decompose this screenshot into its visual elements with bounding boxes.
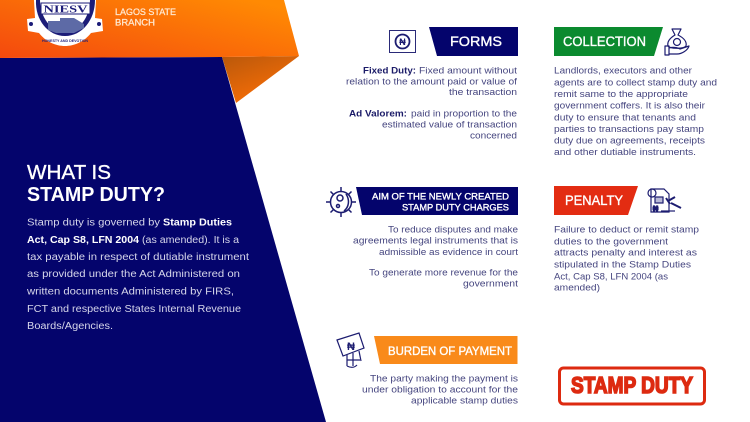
text block: definition: written documents Administered by FIRS, <box>26 286 234 298</box>
text block: collection: remit same to the appropriate <box>554 89 688 100</box>
text block: collection: duty to ensure that tenants and <box>554 112 696 124</box>
panel: forms <box>346 27 518 142</box>
title: STAMP DUTY? <box>27 184 165 206</box>
text block: aim: agreements legal instruments that is <box>353 236 518 246</box>
text block: burden of payment: applicable stamp duties <box>411 396 518 406</box>
text block: collection: government coffers. It is also their <box>554 100 706 112</box>
text block: definition: Stamp Duties <box>163 218 232 228</box>
text block: forms: the transaction <box>449 87 517 98</box>
text block: forms: Ad Valorem: <box>349 108 407 120</box>
icon: naira coin: ₦ <box>399 37 406 47</box>
branch name: LAGOS STATE <box>115 7 176 17</box>
text block: collection <box>554 66 717 158</box>
logo: NIESV emblem: HONESTY AND DEVOTION <box>42 38 88 43</box>
text block: aim: admissible as evidence in court <box>379 247 518 258</box>
text block: collection: agents are to collect stamp duty and <box>554 78 717 88</box>
text block: penalty: duties to the government <box>554 236 668 248</box>
text block: definition: Stamp duty is governed by <box>27 218 160 228</box>
text block: definition: FCT and respective States Internal Revenue <box>27 304 241 315</box>
text block: penalty: Failure to deduct or remit stamp <box>554 224 699 236</box>
panel: collection <box>554 27 717 158</box>
text block: collection: and other dutiable instruments. <box>554 147 696 158</box>
text block: penalty: Act, Cap S8, LFN 2004 (as <box>554 272 668 282</box>
text block: aim <box>353 224 518 290</box>
heading bar: burden of payment: BURDEN OF PAYMENT <box>388 344 513 358</box>
branch name <box>115 7 176 28</box>
heading bar: forms: FORMS <box>450 33 502 49</box>
text block: forms <box>346 66 517 142</box>
text block: forms: concerned <box>470 130 517 142</box>
text block: aim: To reduce disputes and make <box>388 224 518 236</box>
heading bar: burden of payment <box>374 336 518 364</box>
text block: collection: duty due on agreements, receipts <box>554 136 705 146</box>
heading bar: aim: STAMP DUTY CHARGES <box>402 202 509 214</box>
icon: target gear <box>326 187 356 217</box>
text block: definition: (as amended). It is a <box>142 235 239 246</box>
logo: NIESV emblem: NIESV <box>44 4 88 16</box>
text block: burden of payment: The party making the payment is <box>370 374 518 384</box>
title: WHAT IS <box>27 162 111 184</box>
icon: person holding naira sign <box>337 333 364 367</box>
header orange band <box>0 0 299 58</box>
text block: penalty: amended) <box>554 282 600 294</box>
text block: definition: tax payable in respect of dutiable instrument <box>27 252 249 263</box>
text block: aim: To generate more revenue for the <box>369 268 518 278</box>
icon: person holding naira sign: ₦ <box>347 341 355 353</box>
panel: aim <box>326 187 518 290</box>
text block: collection: parties to transactions pay stamp <box>554 124 704 135</box>
text block: penalty: attracts penalty and interest as <box>554 248 697 258</box>
panel: left navy background <box>0 57 326 422</box>
text block: penalty: stipulated in the Stamp Duties <box>554 260 691 270</box>
heading bar: aim <box>356 187 518 215</box>
text block: burden of payment <box>362 374 518 406</box>
branch name: BRANCH <box>115 18 155 28</box>
heading bar: penalty <box>554 186 638 215</box>
heading bar: forms <box>429 27 518 56</box>
heading bar: aim: AIM OF THE NEWLY CREATED <box>372 192 509 202</box>
title <box>27 162 165 206</box>
text block: aim: government <box>463 278 518 290</box>
text block: definition: Boards/Agencies. <box>27 321 113 332</box>
text block: forms: Fixed Duty: <box>363 66 416 76</box>
text block: burden of payment: under obligation to account for the <box>362 384 518 396</box>
ribbon fold <box>222 56 299 103</box>
icon: document and gavel <box>648 189 681 213</box>
text block: definition: Act, Cap S8, LFN 2004 <box>27 235 139 246</box>
text block: forms: paid in proportion to the <box>411 108 517 120</box>
icon: naira coin <box>390 30 416 52</box>
icon: document and gavel: ₦ <box>653 206 658 213</box>
heading bar: collection: COLLECTION <box>563 34 646 49</box>
text block: definition <box>26 218 249 332</box>
text block: forms: relation to the amount paid or value of <box>346 76 517 88</box>
icon: money bag in hand <box>665 29 689 55</box>
heading bar: collection <box>554 27 663 56</box>
text block: definition: as provided under the Act Administered on <box>27 269 240 280</box>
text block: collection: Landlords, executors and other <box>554 66 693 76</box>
stamp: stamp duty <box>560 368 704 404</box>
panel: penalty <box>554 186 699 294</box>
logo: NIESV emblem <box>27 0 103 46</box>
text block: forms: Fixed amount without <box>419 66 517 76</box>
text block: forms: estimated value of transaction <box>382 120 517 130</box>
stamp: stamp duty: STAMP DUTY <box>571 372 693 398</box>
panel: burden of payment <box>337 333 518 406</box>
heading bar: penalty: PENALTY <box>565 193 623 208</box>
text block: penalty <box>554 224 699 294</box>
